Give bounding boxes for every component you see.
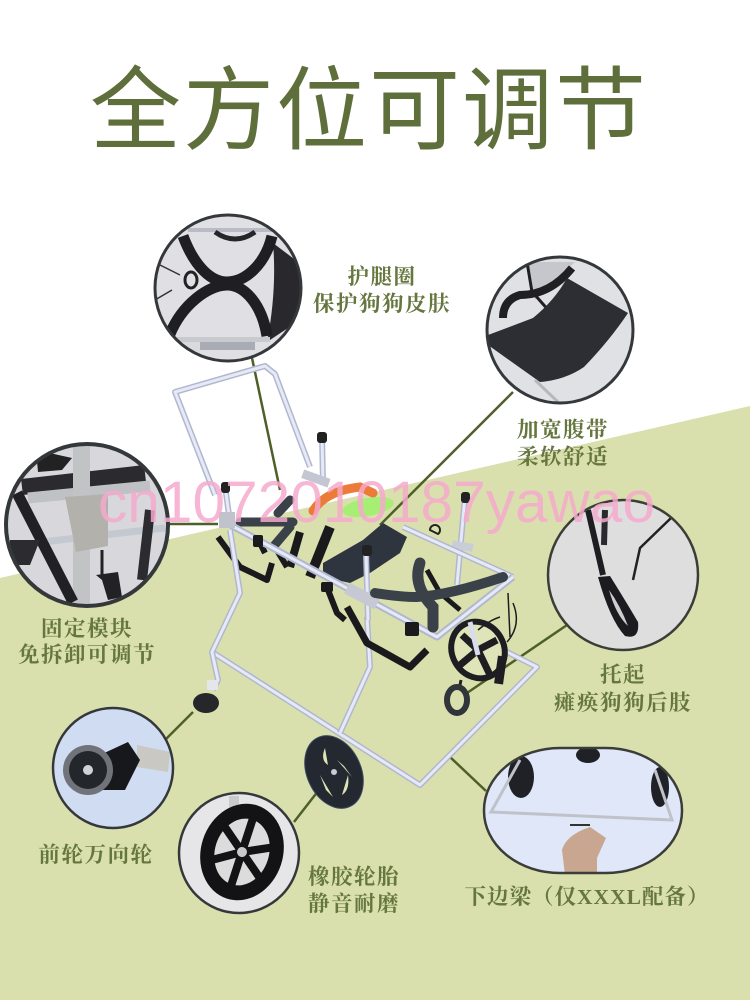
photo: front caster [53,708,173,828]
label: rear leg support: 托起 [600,663,646,687]
label: rear leg support: 瘫痪狗狗后肢 [554,690,692,715]
photo: lower beam [484,747,682,875]
far posts behind frame [301,432,474,585]
label: belly strap [517,418,609,469]
photo: sling loop [545,498,701,654]
label: rubber tire [308,865,400,916]
label: leg guard [313,265,451,316]
label: lower beam: 下边梁（仅XXXL配备） [465,884,709,909]
photo: widened belly strap [485,255,635,405]
rear leg rings [375,563,503,627]
main frame near side [225,522,513,637]
label: fixing block [18,617,156,667]
photo: leg guard ring [154,214,302,362]
black straps and leg padding behind seat [218,500,460,610]
front caster [193,680,219,713]
green ball [341,494,395,520]
photo: rubber wheel [179,793,299,913]
photo: fixing block [5,443,170,610]
label: rubber tire: 橡胶轮胎 [308,865,400,889]
title: 全方位可调节 [90,61,648,162]
label: leg guard: 保护狗狗皮肤 [313,292,451,316]
raised rear handle frame [175,366,310,495]
label: front caster: 前轮万向轮 [38,843,154,867]
rear loop handle [447,680,467,713]
label: fixing block: 免拆卸可调节 [18,643,156,667]
mesh seat [323,523,407,583]
wheelchair frame [175,366,537,818]
label: belly strap: 加宽腹带 [517,418,609,442]
lower bar frame [212,640,537,785]
front and middle legs [212,482,380,733]
small rear wheel [441,593,516,688]
label: rear leg support [554,663,692,715]
label: belly strap: 柔软舒适 [517,445,609,469]
label: rubber tire: 静音耐磨 [308,891,400,916]
watermark: cn1072010187yawao [98,470,655,535]
orange tube [313,487,373,511]
connector lines [165,358,567,822]
label: fixing block: 固定模块 [41,617,133,641]
label: leg guard: 护腿圈 [347,265,417,289]
rear straps and buckles [253,525,440,667]
large wheel [293,726,375,818]
main frame far side [403,527,513,577]
